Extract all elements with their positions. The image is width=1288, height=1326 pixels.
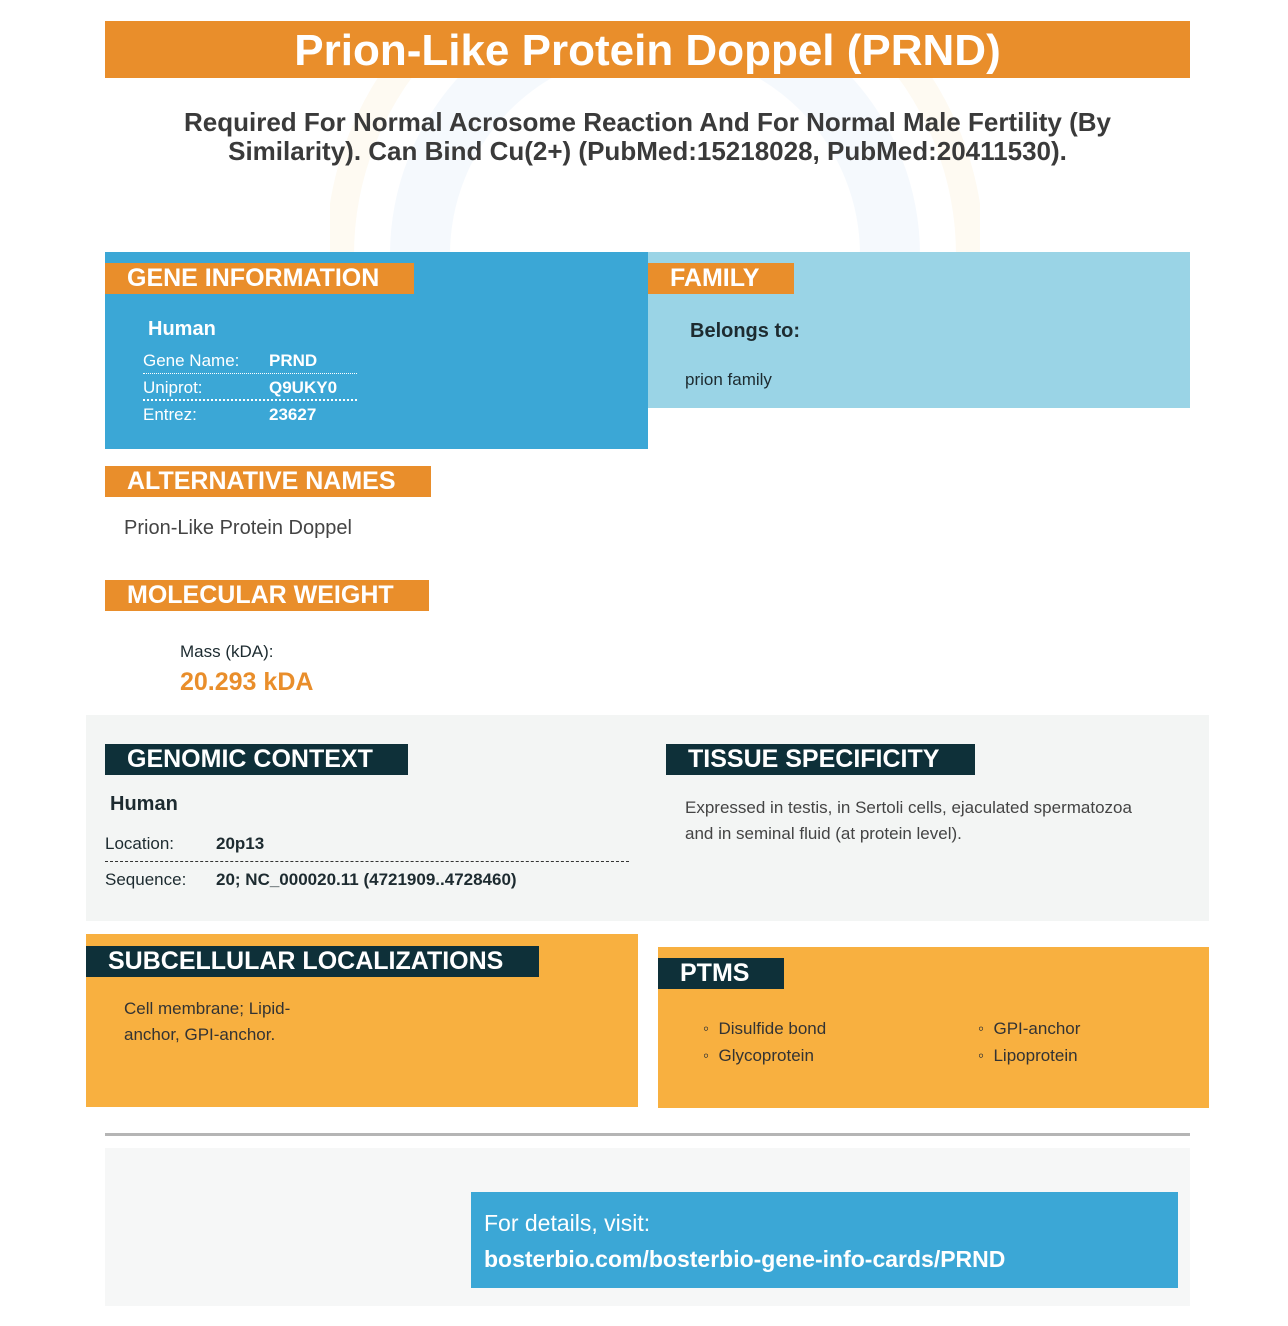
panel: ptms [658, 947, 1209, 1108]
panel: ptms: ◦ Lipoprotein [978, 1046, 1078, 1065]
subtitle: Required For Normal Acrosome Reaction And For Normal Male Fertility (By Similarity). Can Bind Cu(2+) (PubMed:15218028, PubMed:20411530). [184, 107, 1111, 166]
genomic table: Human [110, 793, 178, 815]
panel: genomic context & tissue [86, 715, 1209, 921]
heading: alternative names: ALTERNATIVE NAMES [127, 467, 396, 495]
alternative names text: Prion-Like Protein Doppel [124, 517, 352, 539]
heading: ptms [658, 958, 784, 989]
genomic table: Sequence: [105, 870, 186, 889]
watermark [330, 78, 980, 252]
gene info table: Entrez: [143, 405, 197, 424]
gene info table: Q9UKY0 [269, 378, 337, 397]
panel: subcellular localizations [86, 934, 638, 1107]
genomic table: Location: [105, 834, 174, 853]
heading: ptms: PTMS [680, 959, 749, 987]
callout: details link: bosterbio.com/bosterbio-gene-info-cards/PRND [484, 1246, 1005, 1272]
title [105, 21, 1190, 78]
callout: details link [471, 1192, 1178, 1288]
heading: genomic context: GENOMIC CONTEXT [127, 745, 373, 773]
callout: details link: For details, visit: [484, 1210, 650, 1236]
mass [180, 642, 313, 696]
gene info table: PRND [269, 351, 317, 370]
gene info table: Uniprot: [143, 378, 203, 397]
genomic table: 20p13 [216, 834, 264, 853]
subcellular text: Cell membrane; Lipid-anchor, GPI-anchor. [124, 999, 290, 1044]
family text: Belongs to: [690, 320, 800, 342]
mass: Mass (kDA): [180, 642, 274, 661]
panel: ptms: ◦ GPI-anchor [978, 1019, 1080, 1038]
panel: ptms: ◦ Glycoprotein [703, 1046, 814, 1065]
panel: gene information [105, 252, 648, 449]
heading: family: FAMILY [670, 264, 759, 292]
panel: ptms: ◦ Disulfide bond [703, 1019, 826, 1038]
heading: family [648, 263, 794, 294]
gene info table: Human [148, 318, 216, 340]
mass: 20.293 kDA [180, 668, 313, 696]
gene info table [143, 318, 357, 424]
heading: gene information: GENE INFORMATION [127, 264, 379, 292]
ptm list [703, 1019, 1080, 1065]
heading: subcellular: SUBCELLULAR LOCALIZATIONS [108, 947, 503, 975]
panel: family: prion family [685, 370, 772, 389]
heading: tissue specificity: TISSUE SPECIFICITY [688, 745, 939, 773]
gene info table: 23627 [269, 405, 316, 424]
panel: family [648, 252, 1190, 408]
tissue text: Expressed in testis, in Sertoli cells, ejaculated spermatozoa and in seminal fluid (at protein level). [685, 798, 1132, 843]
heading: molecular weight: MOLECULAR WEIGHT [127, 581, 394, 609]
title: Prion-Like Protein Doppel (PRND) [294, 26, 1001, 75]
gene info table: Gene Name: [143, 351, 239, 370]
footer panel [105, 1148, 1190, 1306]
genomic table [105, 793, 629, 889]
genomic table: 20; NC_000020.11 (4721909..4728460) [216, 870, 517, 889]
